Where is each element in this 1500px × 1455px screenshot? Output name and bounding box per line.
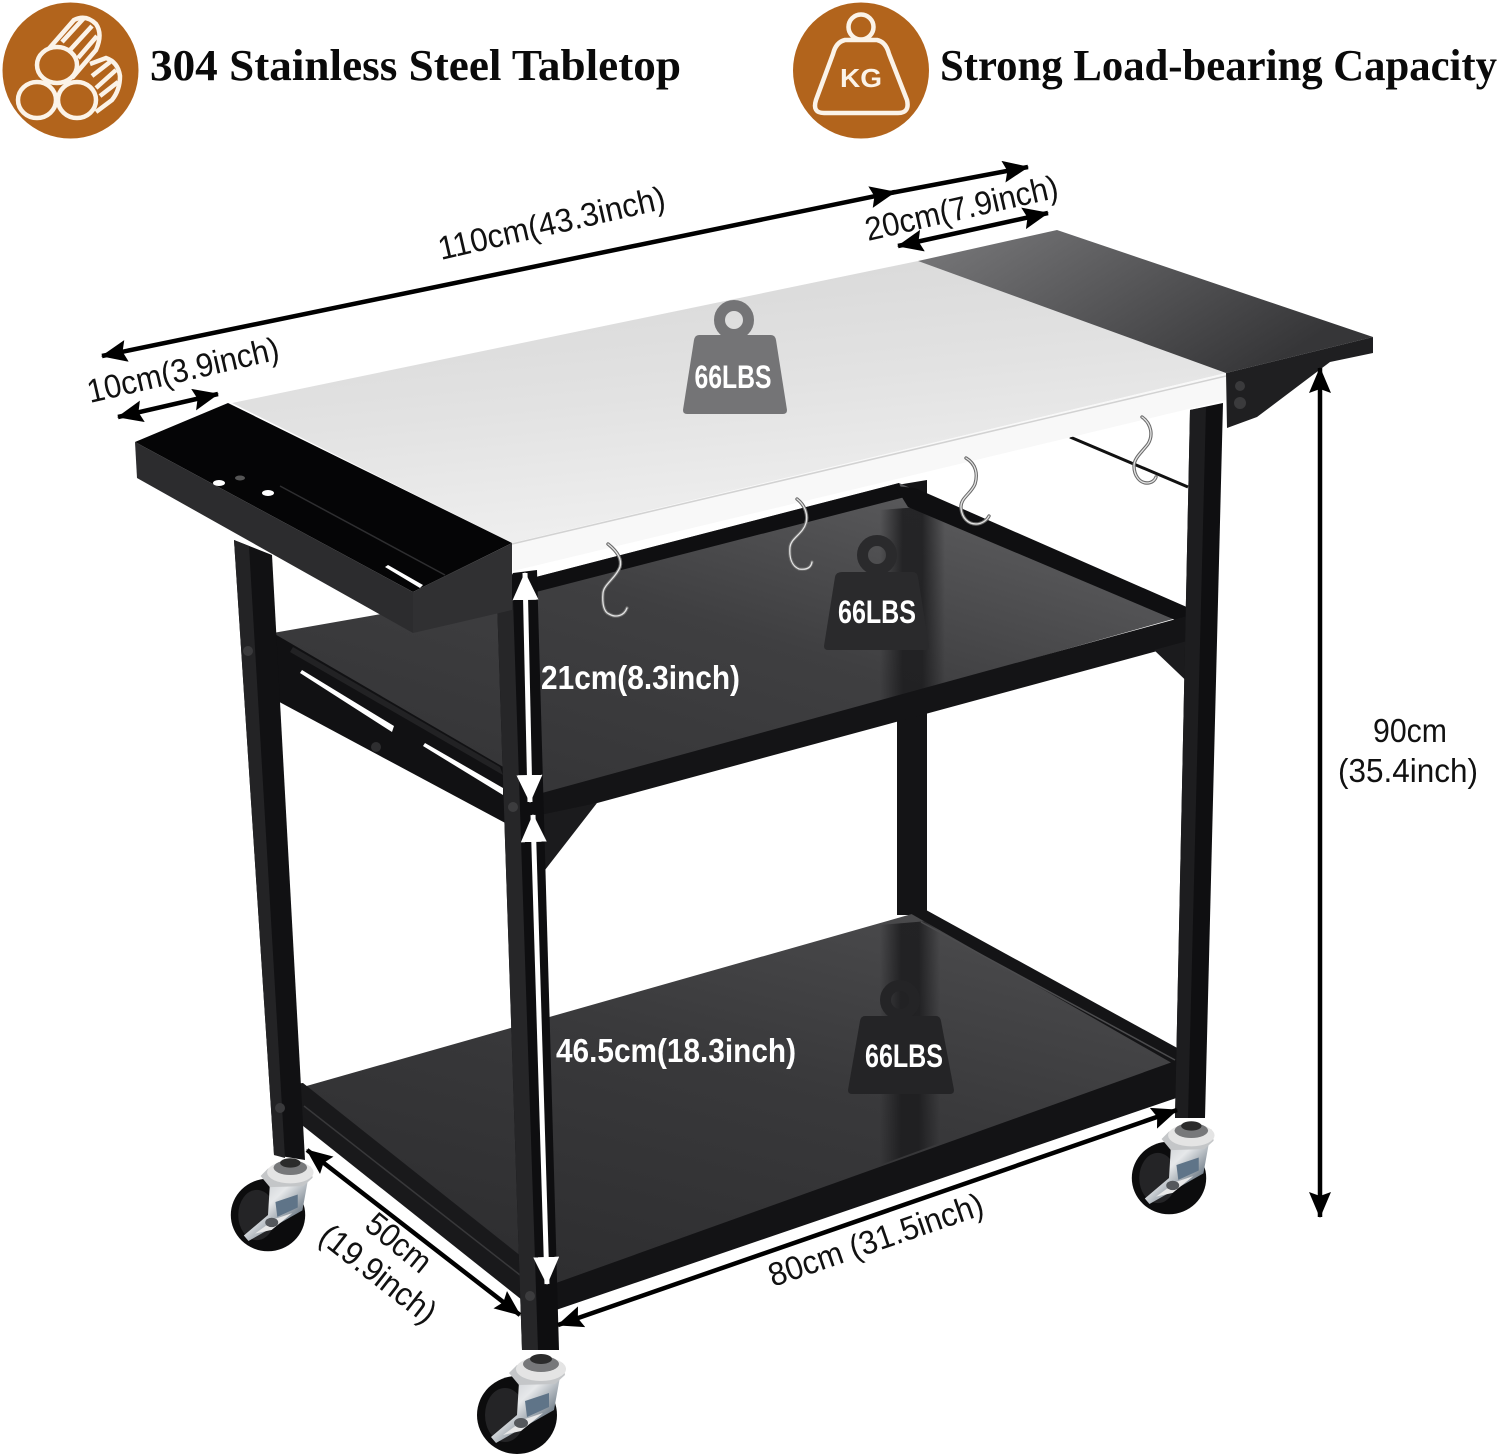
label: 80cm: 80cm (31.5inch) [763, 1185, 988, 1294]
steel tabletop [232, 261, 1226, 571]
cart [135, 230, 1373, 1350]
label: 19.9inch: (19.9inch) [313, 1216, 444, 1330]
arrow: 80cm [558, 1110, 1177, 1325]
label: 35.4inch: (35.4inch) [1338, 752, 1478, 789]
front left leg [497, 570, 559, 1350]
middle shelf [250, 483, 1198, 870]
arrow: 21cm [525, 573, 530, 802]
label: 90cm: 90cm [1373, 712, 1447, 749]
label: 20cm: 20cm(7.9inch) [861, 168, 1062, 248]
lower shelf [283, 910, 1191, 1310]
arrow: 10cm [118, 394, 218, 417]
weight tag: tabletop [683, 306, 787, 414]
label: 110cm: 110cm(43.3inch) [434, 179, 669, 267]
label: 46.5cm: 46.5cm(18.3inch) [556, 1032, 796, 1069]
arrow: 50cm [307, 1150, 520, 1315]
label: 21cm: 21cm(8.3inch) [541, 659, 740, 696]
caster: right [1132, 1121, 1215, 1214]
arrow: top extension [880, 167, 1028, 195]
weight tag: middle shelf [824, 540, 929, 650]
back left leg [234, 540, 305, 1160]
heading: tabletop: 304 Stainless Steel Tabletop [150, 41, 681, 90]
icon: tubes badge [2, 2, 138, 138]
weight tag: tabletop: 66LBS [694, 359, 772, 395]
side tray [135, 403, 512, 633]
front right leg [1175, 403, 1223, 1118]
arrow: 90cm [1318, 368, 1322, 1217]
heading: load-bearing: Strong Load-bearing Capacity [940, 41, 1497, 90]
weight tag: middle shelf: 66LBS [838, 594, 916, 630]
arrow: 110cm [102, 192, 895, 356]
caster: back left [231, 1158, 314, 1251]
weight tag: lower shelf: 66LBS [865, 1038, 943, 1074]
label: 10cm: 10cm(3.9inch) [83, 330, 283, 410]
arrow: 46.5cm [533, 815, 547, 1284]
icon: kg weight badge: KG [840, 63, 882, 93]
arrow: 20cm [898, 213, 1048, 246]
black side shelf [918, 230, 1373, 428]
s-hooks [603, 417, 1156, 616]
caster: front [477, 1354, 566, 1454]
icon: kg weight badge [793, 2, 929, 138]
rod under tabletop [1070, 437, 1188, 487]
label: 50cm: 50cm [359, 1205, 439, 1280]
weight tag: lower shelf [848, 986, 954, 1094]
back right leg [897, 480, 927, 915]
